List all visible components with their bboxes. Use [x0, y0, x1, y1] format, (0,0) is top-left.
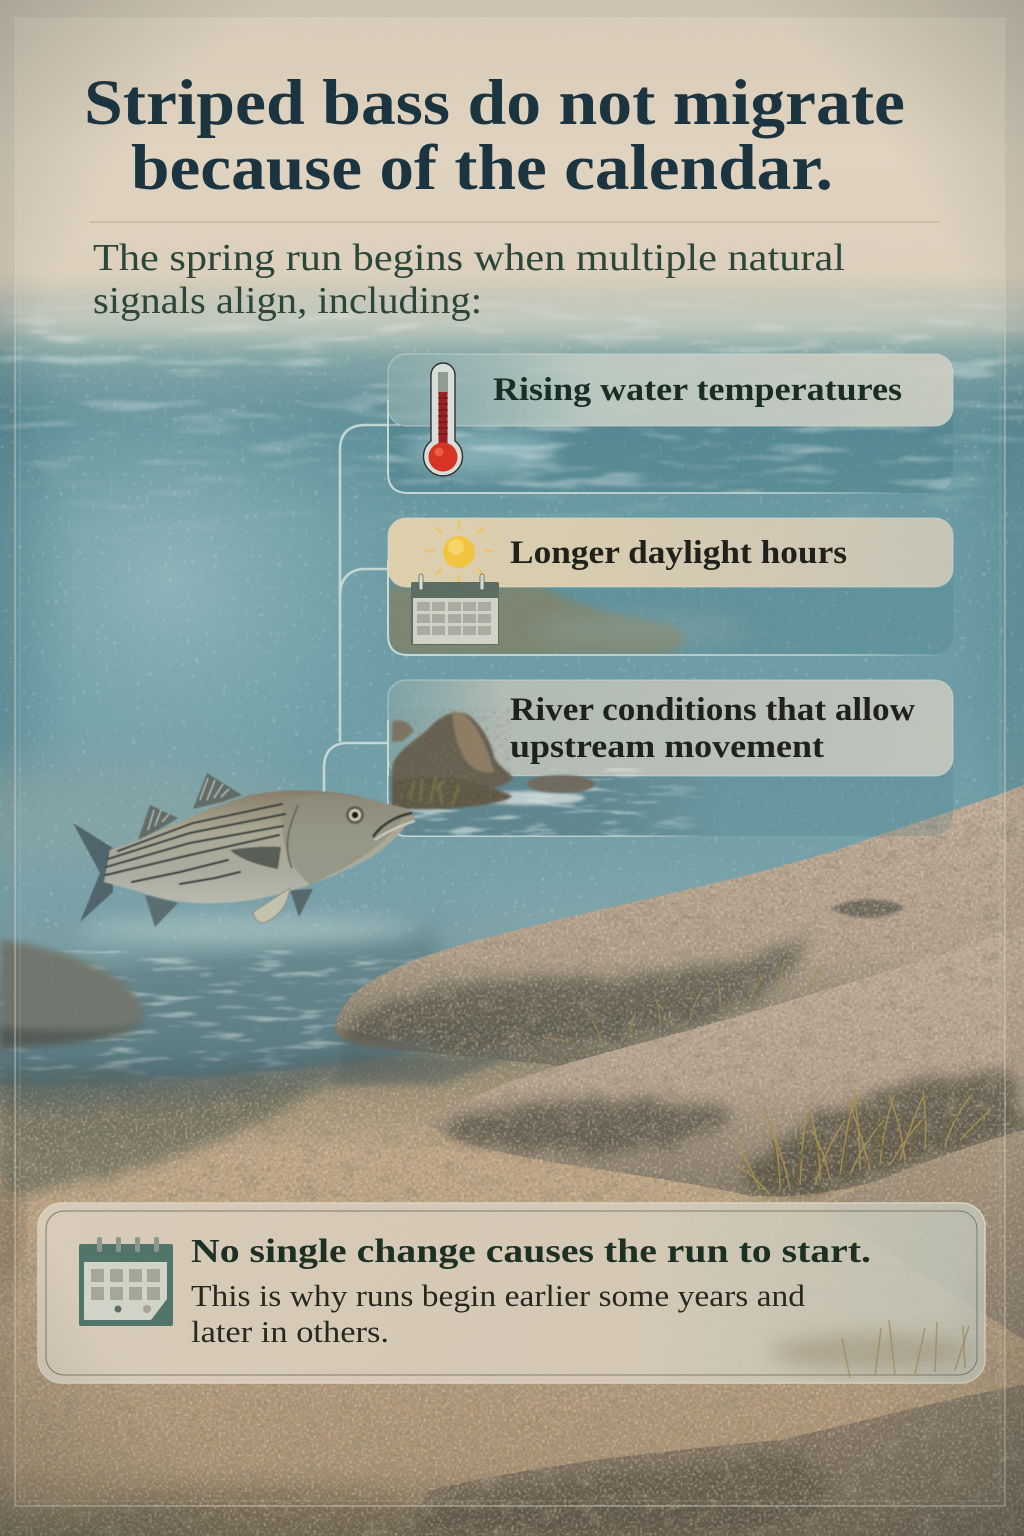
callout heading: No single change causes the run to start.: [191, 1233, 871, 1270]
connector lines from fish to signals: [324, 425, 400, 792]
label: river conditions: [510, 692, 915, 765]
large granite boulder, upper: [335, 785, 1024, 1080]
pectoral and belly fins: [230, 847, 281, 869]
title: [84, 67, 905, 204]
label: river conditions: River conditions that allow: [510, 692, 915, 728]
subtitle: signals align, including:: [93, 280, 482, 322]
body: [104, 790, 414, 903]
sandy riverbed: [0, 1000, 1024, 1536]
striped bass: [73, 773, 415, 927]
stream of water over riverbed: [0, 916, 500, 1100]
callout: no single change: [38, 1203, 985, 1383]
panel: river conditions: [388, 680, 953, 836]
label: rising water temperatures: Rising water temperatures: [493, 372, 902, 408]
large granite boulder, middle: [430, 925, 1024, 1198]
boulders in river vignette: [392, 712, 595, 809]
callout body text: later in others.: [191, 1314, 389, 1349]
boulders at lower right: [400, 1130, 1024, 1536]
stripes: [106, 804, 285, 884]
icon: calendar: [79, 1237, 173, 1326]
callout body text: This is why runs begin earlier some years and: [191, 1278, 806, 1313]
subtitle: The spring run begins when multiple natural: [93, 237, 845, 279]
title: because of the calendar.: [131, 132, 833, 204]
rock and sand grain texture: [0, 780, 1024, 1536]
icon: thermometer: [424, 363, 462, 476]
panel: rising water temperatures: [388, 354, 953, 493]
label: longer daylight hours: Longer daylight hours: [510, 535, 847, 571]
eye: [346, 806, 364, 824]
callout body text: [191, 1278, 806, 1349]
gill: [287, 805, 298, 868]
background: parchment fading to underwater scene: [0, 0, 1024, 1086]
panel: longer daylight hours: [388, 518, 953, 655]
label: river conditions: upstream movement: [510, 729, 824, 765]
subtitle: [93, 237, 845, 322]
icon: sun: [426, 522, 492, 581]
icon: calendar: [411, 574, 499, 645]
riverbank grasses: [544, 962, 990, 1195]
rock at left shore: [0, 940, 145, 1048]
fins: [73, 773, 313, 927]
title: Striped bass do not migrate: [84, 67, 905, 139]
mouth: [373, 813, 412, 837]
shoreline water transition: [0, 1045, 530, 1105]
